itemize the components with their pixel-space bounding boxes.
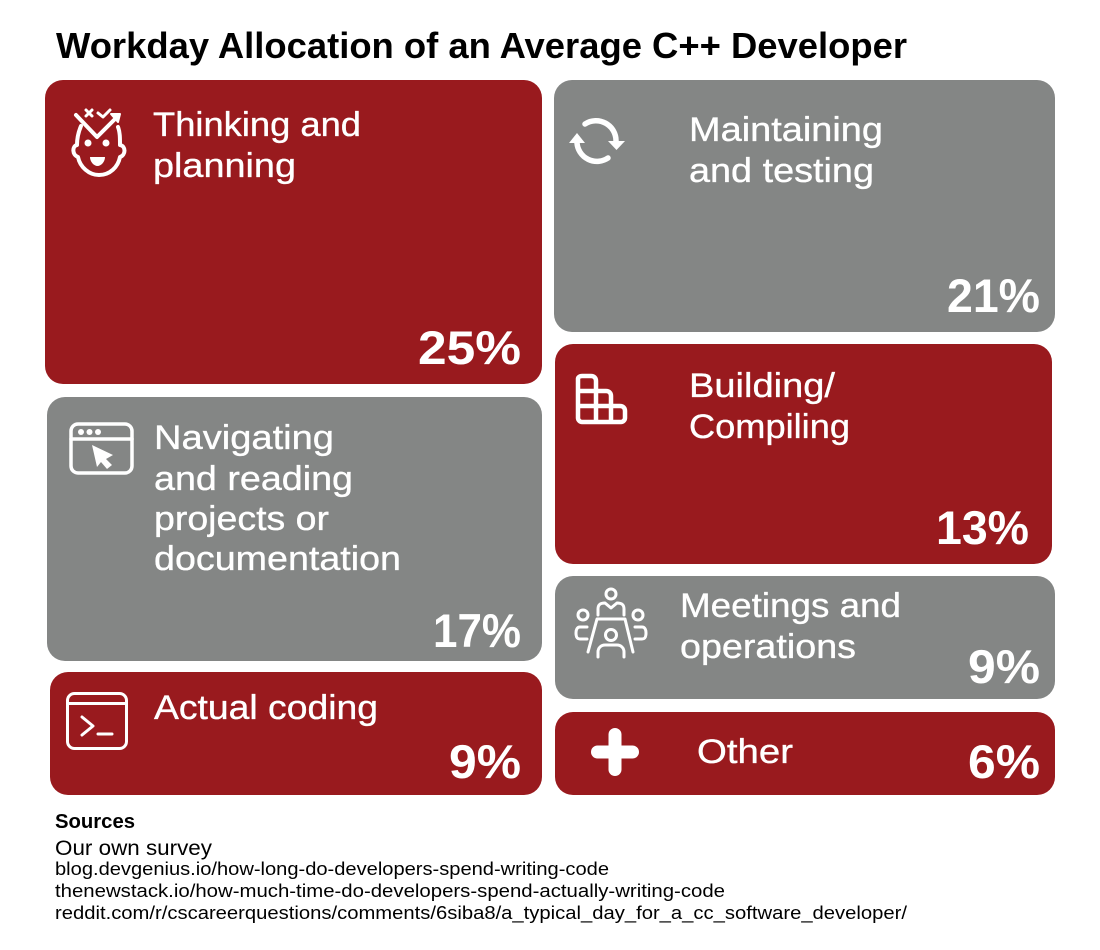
panel: thinking and planning: [45, 80, 542, 384]
icon: browser with cursor: [71, 424, 132, 473]
panel: meetings and operations: [555, 576, 1055, 699]
icon: plus: [598, 734, 632, 770]
label: navigating and reading: documentation: [154, 540, 401, 578]
icon: meeting table: [576, 589, 646, 657]
title: Workday Allocation of an Average C++ Developer: [56, 25, 907, 66]
icon: thinking head: [73, 110, 124, 175]
label: maintaining and testing: and testing: [689, 152, 874, 190]
label: maintaining and testing: Maintaining: [689, 111, 883, 149]
label: meetings and operations: Meetings and: [680, 587, 901, 625]
panel: building and compiling: [555, 344, 1052, 564]
source: devgenius link: blog.devgenius.io/how-long-do-developers-spend-writing-code: [55, 859, 609, 879]
label: navigating and reading: Navigating: [154, 419, 334, 457]
panel: navigating and reading: [47, 397, 542, 661]
label: building and compiling: Compiling: [689, 408, 850, 446]
sources heading: Sources: [55, 811, 135, 833]
value: 9%: 9%: [968, 640, 1040, 693]
value: 17%: 17%: [433, 604, 521, 657]
value: 6%: 6%: [968, 735, 1040, 788]
panel: actual coding: [50, 672, 542, 795]
icon: terminal window: [68, 694, 126, 748]
label: actual coding: Actual coding: [154, 689, 378, 727]
sources: [55, 811, 907, 924]
source: thenewstack link: thenewstack.io/how-much-time-do-developers-spend-actually-writing-code: [55, 881, 725, 901]
icon: refresh arrows: [569, 121, 625, 161]
icon: building blocks: [578, 376, 625, 422]
panel: maintaining and testing: [554, 80, 1055, 332]
label: meetings and operations: operations: [680, 628, 856, 666]
value: 9%: 9%: [449, 735, 521, 788]
panel: other: [555, 712, 1055, 795]
label: thinking and planning: Thinking and: [153, 106, 361, 144]
value: 13%: 13%: [936, 501, 1029, 554]
source: own survey: Our own survey: [55, 837, 213, 860]
label: building and compiling: Building/: [689, 367, 836, 405]
label: thinking and planning: planning: [153, 147, 296, 185]
source: reddit link: reddit.com/r/cscareerquestions/comments/6siba8/a_typical_day_for_a_cc_software_developer/: [55, 903, 907, 924]
label: navigating and reading: and reading: [154, 460, 353, 498]
label: navigating and reading: projects or: [154, 500, 329, 538]
value: 21%: 21%: [947, 269, 1040, 322]
label: other: Other: [697, 733, 793, 771]
value: 25%: 25%: [418, 321, 521, 374]
